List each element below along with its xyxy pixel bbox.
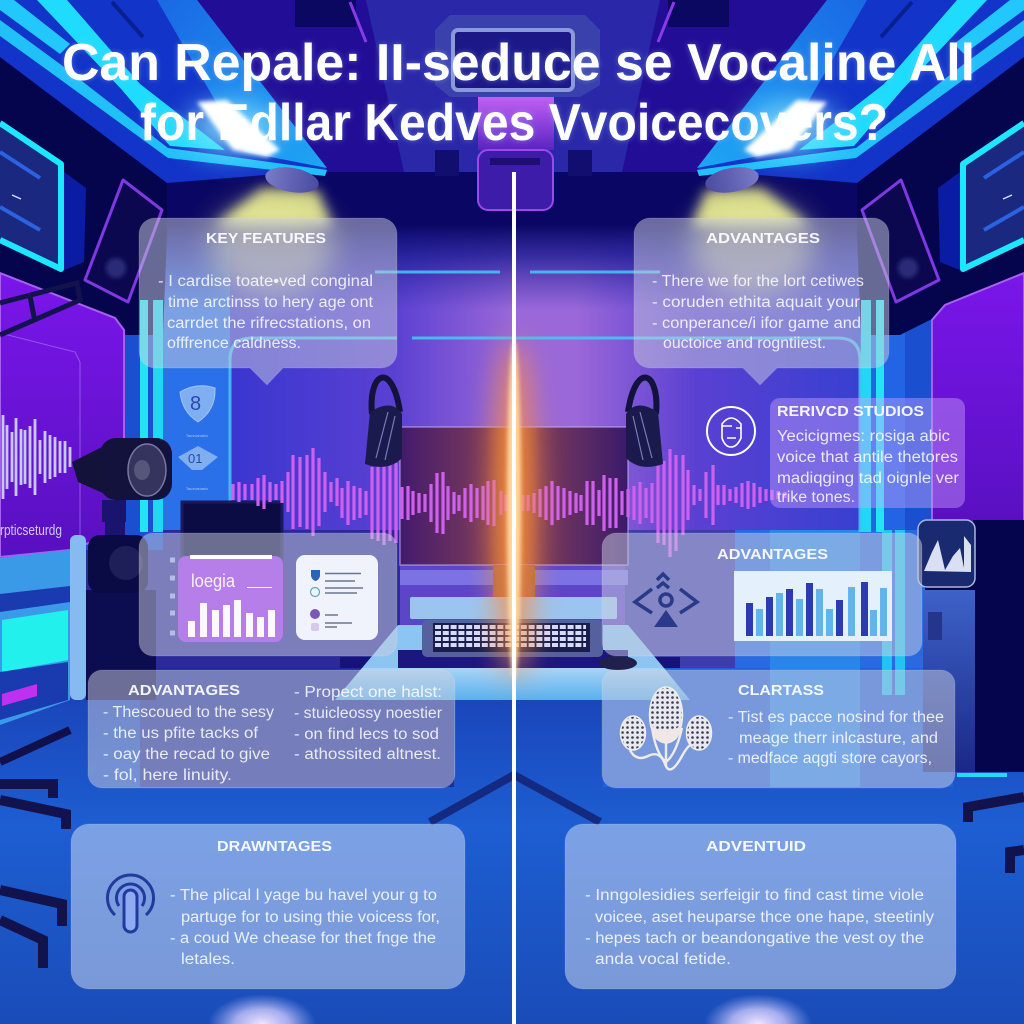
room outlines <box>230 272 860 532</box>
back wall <box>230 225 860 535</box>
icon: tag: 01 <box>188 451 202 466</box>
camera <box>72 438 172 536</box>
left wall <box>0 260 163 550</box>
body text <box>652 273 864 352</box>
cyan wall bars <box>140 300 148 532</box>
body text: partuge for to using thie voicess for, <box>181 909 440 926</box>
icon: shield: 8 <box>190 393 201 415</box>
body text: Yecicigmes: rosiga abic <box>777 428 950 445</box>
body text: anda vocal fetide. <box>595 951 731 968</box>
title glow <box>62 34 975 152</box>
right wall <box>905 260 1024 530</box>
right column text: - on find lecs to sod <box>294 726 439 743</box>
keyboard <box>422 620 603 657</box>
right column text: - athossited altnest. <box>294 746 441 763</box>
floor <box>0 665 1024 1024</box>
heading: ADVANTAGES <box>706 230 820 247</box>
body text: time arctinss to hery age ont <box>168 294 374 311</box>
headphones <box>365 378 402 467</box>
body text: - conperance/i ifor game and <box>652 315 861 332</box>
back wall top shade <box>163 225 933 310</box>
floor glows <box>208 964 812 1024</box>
wall screen <box>0 123 60 268</box>
panel: revived studios <box>770 398 965 508</box>
panel: clartass <box>602 670 955 788</box>
body text: madiqging tad oignle ver <box>777 470 959 487</box>
body text: - hepes tach or beandongative the vest oy the <box>585 930 924 947</box>
lower wall band behind panels <box>85 530 405 670</box>
body text <box>777 428 959 506</box>
left wall caption: rpticseturdg <box>0 522 62 539</box>
icon: tag: Tauxvanaeic <box>186 486 208 491</box>
title line 1: Can Repale: II-seduce se Vocaline All <box>62 34 975 92</box>
ceiling lamp body <box>263 163 321 197</box>
icon: tag <box>178 446 218 491</box>
body text: ouctoice and rogntiiest. <box>663 335 826 352</box>
left purple wall panel <box>0 273 124 557</box>
left column text: - fol, here linuity. <box>103 767 232 784</box>
body text: voice that antile thetores <box>777 449 958 466</box>
panel: adventuid <box>565 824 956 989</box>
left wall waveform <box>3 415 70 499</box>
bar chart <box>734 571 892 641</box>
left column text <box>103 704 274 784</box>
dark box behind left chart panel <box>182 502 282 562</box>
body text <box>728 709 944 767</box>
panel: advantages lower left <box>88 670 455 788</box>
body text: voicee, aset heuparse thce one hape, steetinly <box>595 909 934 926</box>
heading: KEY FEATURES <box>206 230 326 247</box>
light cone <box>215 188 332 226</box>
right column text: - Propect one halst: <box>294 684 442 701</box>
desk <box>335 597 690 700</box>
left column text: - the us pfite tacks of <box>103 725 259 742</box>
right purple wall panel <box>932 273 1024 530</box>
chairs <box>0 784 1024 968</box>
side icons <box>170 560 175 633</box>
floor tripod <box>430 775 600 822</box>
body text: offfrence caldness. <box>167 335 301 352</box>
centre beam line <box>512 172 516 1024</box>
title <box>62 34 975 152</box>
right column text <box>294 684 442 763</box>
bars <box>188 600 275 637</box>
card: legend list <box>296 555 378 640</box>
extended right cyan bars <box>882 530 892 695</box>
heading: ADVENTUID <box>706 838 806 855</box>
panel: advantages top right <box>634 218 889 385</box>
body text: - medface aqgti store cayors, <box>728 750 932 767</box>
wall speaker <box>85 180 162 302</box>
body text: - Tist es pacce nosind for thee <box>728 709 944 726</box>
panel: advantages chart right <box>602 533 922 656</box>
icon: signal antenna <box>108 875 154 932</box>
body text: - The plical l yage bu havel your g to <box>170 887 437 904</box>
title line 2: for Edllar Kedves Vvoicecovers? <box>140 94 888 152</box>
ceiling centre panel <box>190 0 834 172</box>
body text: - There we for the lort cetiwes <box>652 273 864 290</box>
centre beam glow <box>492 340 536 680</box>
heading: DRAWNTAGES <box>217 838 332 855</box>
ceiling side and wall details, left and mirrored right <box>0 0 334 532</box>
icon: signal chevrons <box>635 574 697 627</box>
left column text: - Thescoued to the sesy <box>103 704 274 721</box>
panel: key features <box>139 218 397 385</box>
panel: drawntages <box>71 824 465 989</box>
body text <box>158 273 374 352</box>
body text <box>170 887 440 968</box>
heading: ADVANTAGES <box>717 546 828 563</box>
card: purple bar chart <box>178 555 283 642</box>
icon: shield <box>180 386 215 438</box>
bright ceiling lamps over title <box>197 100 827 157</box>
monitor <box>400 427 628 600</box>
right cabinet <box>918 520 1024 777</box>
card label: loegia <box>191 571 236 591</box>
ceiling fixture <box>435 15 600 210</box>
right column text: - stuicleossy noestier <box>294 705 442 722</box>
heading: CLARTASS <box>738 682 824 699</box>
body text: - Inngolesidies serfeigir to find cast time viole <box>585 887 924 904</box>
title glow: for Edllar Kedves Vvoicecovers? <box>140 94 888 152</box>
body text: trike tones. <box>777 489 855 506</box>
mouse <box>599 656 637 670</box>
lamp glow <box>188 102 276 154</box>
icon: face in circle <box>707 407 755 455</box>
left column text: - oay the recad to give <box>103 746 270 763</box>
body text: carrdet the rifrecstations, on <box>167 315 371 332</box>
body text: - a coud We chease for thet fnge the <box>170 930 436 947</box>
heading: ADVANTAGES <box>128 682 240 699</box>
icon: shield: Tauxvanaeic <box>186 433 208 438</box>
left cabinet <box>0 535 156 762</box>
panel: left charts <box>139 533 397 656</box>
title glow: Can Repale: II-seduce se Vocaline All <box>62 34 975 92</box>
pink soundwave <box>233 448 785 557</box>
body text: - coruden ethita aquait your <box>652 294 860 311</box>
body text: letales. <box>181 951 235 968</box>
body text <box>585 887 934 968</box>
heading: RERIVCD STUDIOS <box>777 403 924 420</box>
icon: microphones <box>620 687 712 769</box>
mic arm <box>0 283 80 335</box>
body text: meage therr inlcasture, and <box>739 730 938 747</box>
body text: - I cardise toate•ved conginal <box>158 273 373 290</box>
